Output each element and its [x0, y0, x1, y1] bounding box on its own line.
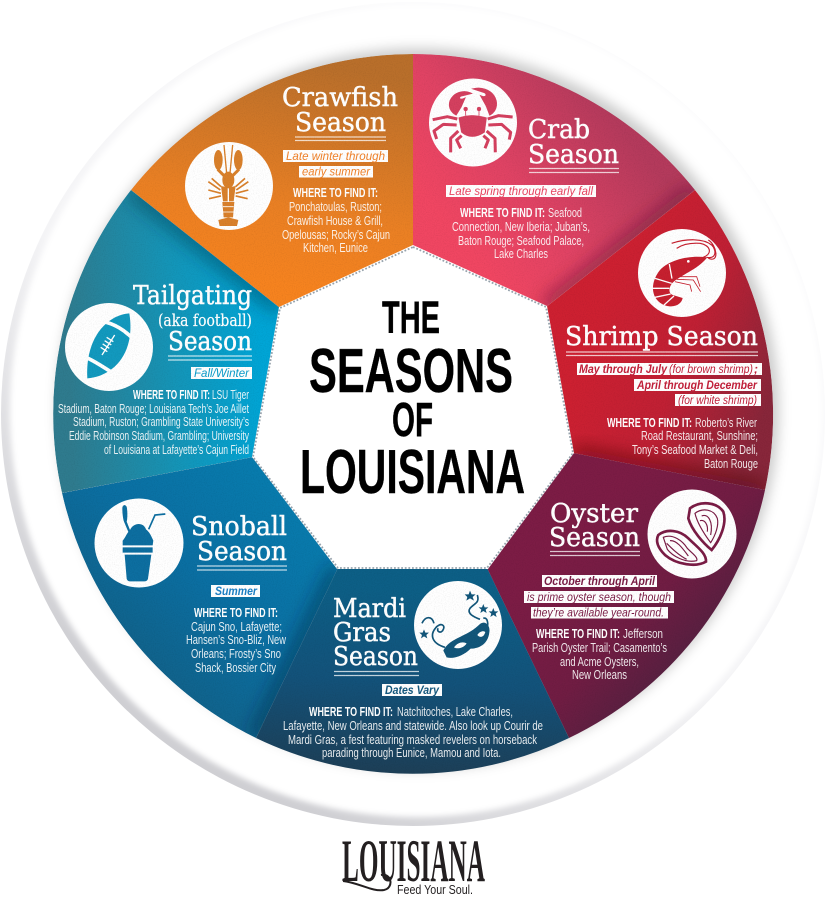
shrimp where to find it: Baton Rouge — [704, 456, 758, 471]
crawfish where to find it: Kitchen, Eunice — [303, 240, 368, 255]
center heptagon with title — [252, 245, 574, 569]
tailgating where to find it: of Louisiana at Lafayette’s Cajun Field — [104, 442, 249, 457]
mardi gras where to find it — [283, 704, 543, 760]
logo: Louisiana Feed Your Soul: Feed Your Soul. — [397, 882, 473, 897]
mardi gras where to find it: WHERE TO FIND IT: — [309, 704, 393, 719]
shrimp dates — [577, 362, 762, 407]
shrimp where to find it: Road Restaurant, Sunshine; — [641, 428, 758, 443]
crawfish where to find it: WHERE TO FIND IT: — [293, 185, 378, 200]
icon: crawfish — [185, 142, 273, 230]
snoball heading: Snoball — [191, 512, 287, 542]
crawfish where to find it — [282, 185, 390, 255]
snoball where to find it: Shack, Bossier City — [195, 660, 276, 675]
shrimp where to find it: Roberto’s River — [695, 415, 757, 430]
crawfish dates: Late winter through — [286, 149, 385, 163]
panel: snoball season — [62, 457, 338, 738]
tailgating heading: Season — [168, 327, 252, 357]
mardi gras where to find it: Natchitoches, Lake Charles, — [397, 704, 513, 719]
crawfish heading: Crawfish — [282, 83, 398, 113]
tailgating wedge background — [53, 190, 280, 493]
mardi gras where to find it: Lafayette, New Orleans and statewide. Also look up Courir de — [283, 718, 543, 733]
oyster where to find it: WHERE TO FIND IT: — [536, 626, 620, 641]
mardi gras heading: Gras — [333, 618, 391, 648]
icon: football — [65, 303, 153, 391]
icon: mardi gras mask — [414, 581, 502, 669]
logo: Louisiana Feed Your Soul — [342, 828, 485, 897]
crab where to find it: Lake Charles — [494, 246, 548, 261]
mardi gras where to find it: Mardi Gras, a fest featuring masked revelers on horseback — [288, 732, 537, 747]
crawfish dates: early summer — [302, 164, 371, 178]
crawfish where to find it: Opelousas; Rocky’s Cajun — [282, 227, 390, 242]
tailgating where to find it: LSU Tiger — [212, 387, 249, 402]
shrimp where to find it: WHERE TO FIND IT: — [607, 415, 692, 430]
title: THE — [382, 292, 440, 343]
oyster heading — [549, 499, 640, 556]
crab heading: Season — [528, 140, 619, 170]
panel: tailgating season — [53, 190, 280, 493]
mardi gras dates: Dates Vary — [385, 683, 440, 697]
panel: crawfish season — [131, 54, 413, 308]
oyster dates — [524, 574, 674, 620]
mardi gras heading: Season — [333, 642, 418, 672]
crawfish wedge background — [131, 54, 413, 308]
oyster dates: they’re available year-round. — [533, 606, 664, 620]
shrimp where to find it — [607, 415, 758, 471]
crab dates: Late spring through early fall — [449, 184, 593, 198]
crab where to find it: Seafood — [548, 205, 582, 220]
shrimp dates: April through December — [636, 378, 758, 392]
tailgating dates: Fall/Winter — [194, 366, 250, 380]
snoball where to find it: Orleans; Frosty’s Sno — [191, 646, 281, 661]
snoball dates: Summer — [215, 584, 258, 598]
panel: shrimp season — [546, 190, 773, 490]
panel: mardi gras season — [256, 568, 569, 774]
oyster dates: is prime oyster season, though — [527, 590, 671, 604]
oyster where to find it: Jefferson — [623, 626, 663, 641]
shrimp where to find it: Tony’s Seafood Market & Deli, — [632, 442, 758, 457]
icon: oyster — [648, 490, 736, 578]
mardi gras heading: Mardi — [333, 594, 406, 624]
crawfish where to find it: Ponchatoulas, Ruston; — [289, 199, 382, 214]
crab where to find it: Connection, New Iberia; Juban’s, — [452, 219, 590, 234]
icon: crab — [429, 78, 517, 166]
mardi gras where to find it: parading through Eunice, Mamou and Iota. — [322, 745, 501, 760]
shrimp dates: May through July — [579, 362, 668, 376]
crab heading — [528, 115, 619, 172]
crab where to find it — [452, 205, 590, 261]
panel: oyster season — [487, 453, 765, 738]
title — [300, 292, 525, 507]
panel: crab season — [413, 54, 695, 307]
oyster where to find it: New Orleans — [572, 667, 627, 682]
infographic: the seasons of Louisiana: LOUISIANA — [342, 828, 485, 894]
tailgating where to find it: Stadium, Baton Rouge; Louisiana Tech’s Joe Aillet — [58, 401, 249, 416]
crab where to find it: WHERE TO FIND IT: — [460, 205, 545, 220]
tailgating where to find it — [58, 387, 249, 457]
oyster wedge background — [487, 453, 765, 738]
shrimp dates: (for white shrimp) — [678, 393, 757, 407]
title: LOUISIANA — [300, 438, 525, 507]
title: OF — [392, 394, 433, 447]
crawfish dates — [283, 149, 388, 178]
oyster heading: Season — [549, 523, 640, 553]
tailgating heading: Tailgating — [133, 281, 252, 311]
snoball heading — [191, 512, 287, 570]
oyster heading: Oyster — [550, 499, 639, 529]
tailgating heading: (aka football) — [158, 311, 252, 331]
mardi gras heading — [333, 594, 419, 676]
tailgating where to find it: WHERE TO FIND IT: — [133, 387, 210, 402]
icon: shrimp — [638, 229, 726, 317]
tailgating where to find it: Stadium, Ruston; Grambling State University’s — [73, 414, 249, 429]
crab where to find it: Baton Rouge; Seafood Palace, — [458, 233, 584, 248]
crawfish heading: Season — [295, 108, 386, 138]
shrimp dates: ; — [754, 362, 758, 376]
snoball wedge background — [62, 457, 338, 738]
shrimp wedge background — [546, 190, 773, 490]
crawfish where to find it: Crawfish House & Grill, — [287, 213, 383, 228]
icon: snoball cup — [94, 498, 184, 588]
crab wedge background — [413, 54, 695, 307]
crawfish heading — [282, 83, 398, 140]
snoball where to find it: Cajun Sno, Lafayette; — [191, 619, 282, 634]
snoball where to find it: Hansen’s Sno-Bliz, New — [186, 632, 286, 647]
grain texture over the wheel — [53, 54, 773, 774]
oyster where to find it: and Acme Oysters, — [560, 654, 639, 669]
title: SEASONS — [309, 337, 513, 406]
snoball where to find it: WHERE TO FIND IT: — [194, 605, 278, 620]
oyster dates: October through April — [544, 574, 656, 588]
tailgating where to find it: Eddie Robinson Stadium, Grambling; University — [69, 428, 249, 443]
shrimp heading: Shrimp Season — [565, 322, 758, 352]
tailgating heading — [133, 281, 252, 360]
oyster where to find it: Parish Oyster Trail; Casamento’s — [532, 640, 667, 655]
snoball heading: Season — [197, 537, 287, 567]
mardi gras wedge background — [256, 568, 569, 774]
snoball where to find it — [186, 605, 286, 675]
oyster where to find it — [532, 626, 667, 682]
shrimp dates: (for brown shrimp) — [669, 362, 753, 376]
crab heading: Crab — [528, 115, 590, 145]
